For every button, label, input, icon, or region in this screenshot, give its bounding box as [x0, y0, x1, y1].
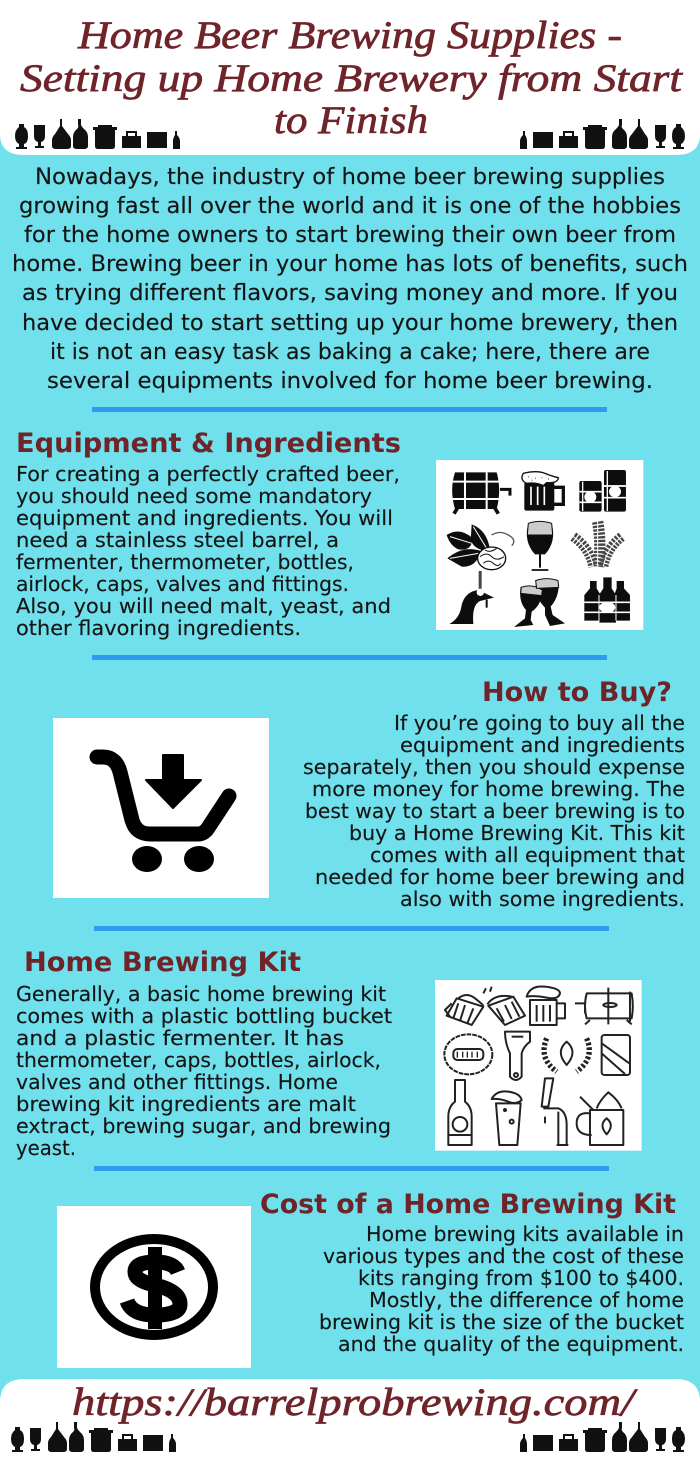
- text block: how to buy: buy a Home Brewing Kit. This kit: [349, 821, 685, 845]
- icon: bottle cap: [444, 1034, 492, 1074]
- text block: how to buy: [303, 711, 685, 911]
- intro text: Nowadays, the industry of home beer brewing supplies: [35, 164, 665, 190]
- icon row: footer right: [520, 1422, 685, 1452]
- icon: cart: [97, 755, 229, 872]
- section heading: Cost of a Home Brewing Kit: Cost of a Home Brewing Kit: [260, 1189, 676, 1220]
- text block: kit: comes with a plastic bottling bucket: [16, 1004, 392, 1028]
- image panel: outline beer icons: [435, 980, 642, 1151]
- icon row: brewing gear left: [15, 119, 180, 149]
- text block: equipment: need a stainless steel barrel, a: [16, 528, 339, 552]
- icon: hop wreath: [544, 1038, 589, 1072]
- icon: barrel: [575, 988, 633, 1024]
- text block: how to buy: comes with all equipment that: [370, 843, 685, 867]
- text block: kit: thermometer, caps, bottles, airlock,: [16, 1048, 381, 1072]
- text block: kit: Generally, a basic home brewing kit: [16, 982, 386, 1006]
- icon: pint glass: [492, 1091, 522, 1145]
- icon: barrel: [452, 472, 510, 514]
- text block: how to buy: best way to start a beer brewing is to: [305, 799, 685, 823]
- text block: cost: Home brewing kits available in: [366, 1222, 684, 1246]
- text block: how to buy: more money for home brewing. The: [312, 777, 685, 801]
- intro text: growing fast all over the world and it is one of the hobbies: [19, 193, 681, 219]
- title: Setting up Home Brewery from Start: [20, 57, 683, 100]
- text block: how to buy: equipment and ingredients: [400, 733, 685, 757]
- icon: hops: [447, 524, 514, 570]
- intro text: it is not an easy task as baking a cake; here, there are: [50, 339, 650, 365]
- title: to Finish: [274, 99, 428, 142]
- text block: cost: Mostly, the difference of home: [369, 1288, 684, 1312]
- icon: wheat: [573, 522, 622, 567]
- text block: equipment: other flavoring ingredients.: [16, 616, 301, 640]
- title: [20, 14, 683, 142]
- icon: stein: [577, 1092, 623, 1145]
- text block: kit: valves and other fittings. Home: [16, 1070, 338, 1094]
- icon: can: [602, 1035, 630, 1075]
- text block: equipment: For creating a perfectly crafted beer,: [16, 462, 400, 486]
- text block: equipment: fermenter, thermometer, bottles,: [16, 550, 354, 574]
- icon row: brewing gear right: [520, 119, 685, 149]
- text block: how to buy: separately, then you should expense: [303, 755, 685, 779]
- text block: equipment: you should need some mandatory: [16, 484, 372, 508]
- text block: cost: brewing kit is the size of the bucket: [319, 1310, 684, 1334]
- text block: kit: [16, 982, 392, 1160]
- image panel: black beer icons: [436, 460, 643, 630]
- text block: cost: kits ranging from $100 to $400.: [358, 1266, 684, 1290]
- text block: equipment: airlock, caps, valves and fittings.: [16, 572, 349, 596]
- section heading: Home Brewing Kit: Home Brewing Kit: [24, 947, 301, 978]
- icon: bottle: [448, 1080, 472, 1145]
- text block: equipment: equipment and ingredients. You will: [16, 506, 393, 530]
- text block: how to buy: also with some ingredients.: [400, 887, 685, 911]
- icon: beer cans: [579, 470, 626, 512]
- website url: https://barrelprobrewing.com/: [72, 1381, 638, 1424]
- text block: equipment: [16, 462, 400, 640]
- icon: beer mug: [522, 472, 563, 511]
- text block: cost: various types and the cost of these: [323, 1244, 684, 1268]
- icon: bottle opener: [505, 1032, 530, 1080]
- icon: beer tap: [449, 571, 494, 624]
- icon: clinking mugs: [445, 987, 525, 1025]
- text block: equipment: Also, you will need malt, yeast, and: [16, 594, 391, 618]
- text block: how to buy: If you’re going to buy all the: [394, 711, 685, 735]
- intro text: home. Brewing beer in your home has lots of benefits, such: [12, 251, 688, 277]
- icon: dollar in circle: [95, 1239, 213, 1335]
- text block: how to buy: needed for home beer brewing and: [315, 865, 685, 889]
- intro text: several equipments involved for home beer brewing.: [47, 368, 653, 394]
- text block: kit: brewing kit ingredients are malt: [16, 1092, 356, 1116]
- icon: clinking glasses: [514, 579, 565, 627]
- intro text: as trying different flavors, saving money and more. If you: [22, 280, 678, 306]
- section heading: How to Buy?: How to Buy?: [482, 677, 672, 708]
- header banner: [0, 0, 700, 155]
- icon: tap: [542, 1078, 568, 1145]
- icon row: footer left: [11, 1422, 176, 1452]
- text block: kit: extract, brewing sugar, and brewing: [16, 1114, 391, 1138]
- text block: cost: [319, 1222, 684, 1356]
- icon: tulip glass: [527, 521, 553, 570]
- image panel: shopping cart icon: [53, 718, 269, 898]
- text block: kit: and a plastic fermenter. It has: [16, 1026, 344, 1050]
- title: Home Beer Brewing Supplies -: [77, 14, 622, 57]
- text block: kit: yeast.: [16, 1136, 76, 1160]
- icon: bottles: [584, 577, 630, 623]
- footer banner: [0, 1379, 700, 1458]
- text block: cost: and the quality of the equipment.: [338, 1332, 684, 1356]
- image panel: dollar icon: [57, 1206, 251, 1368]
- intro text: have decided to start setting up your home brewery, then: [22, 310, 678, 336]
- intro text: [12, 164, 688, 394]
- intro text: for the home owners to start brewing their own beer from: [24, 222, 676, 248]
- section heading: Equipment & Ingredients: Equipment & Ingredients: [16, 428, 401, 459]
- icon: mug: [527, 986, 565, 1025]
